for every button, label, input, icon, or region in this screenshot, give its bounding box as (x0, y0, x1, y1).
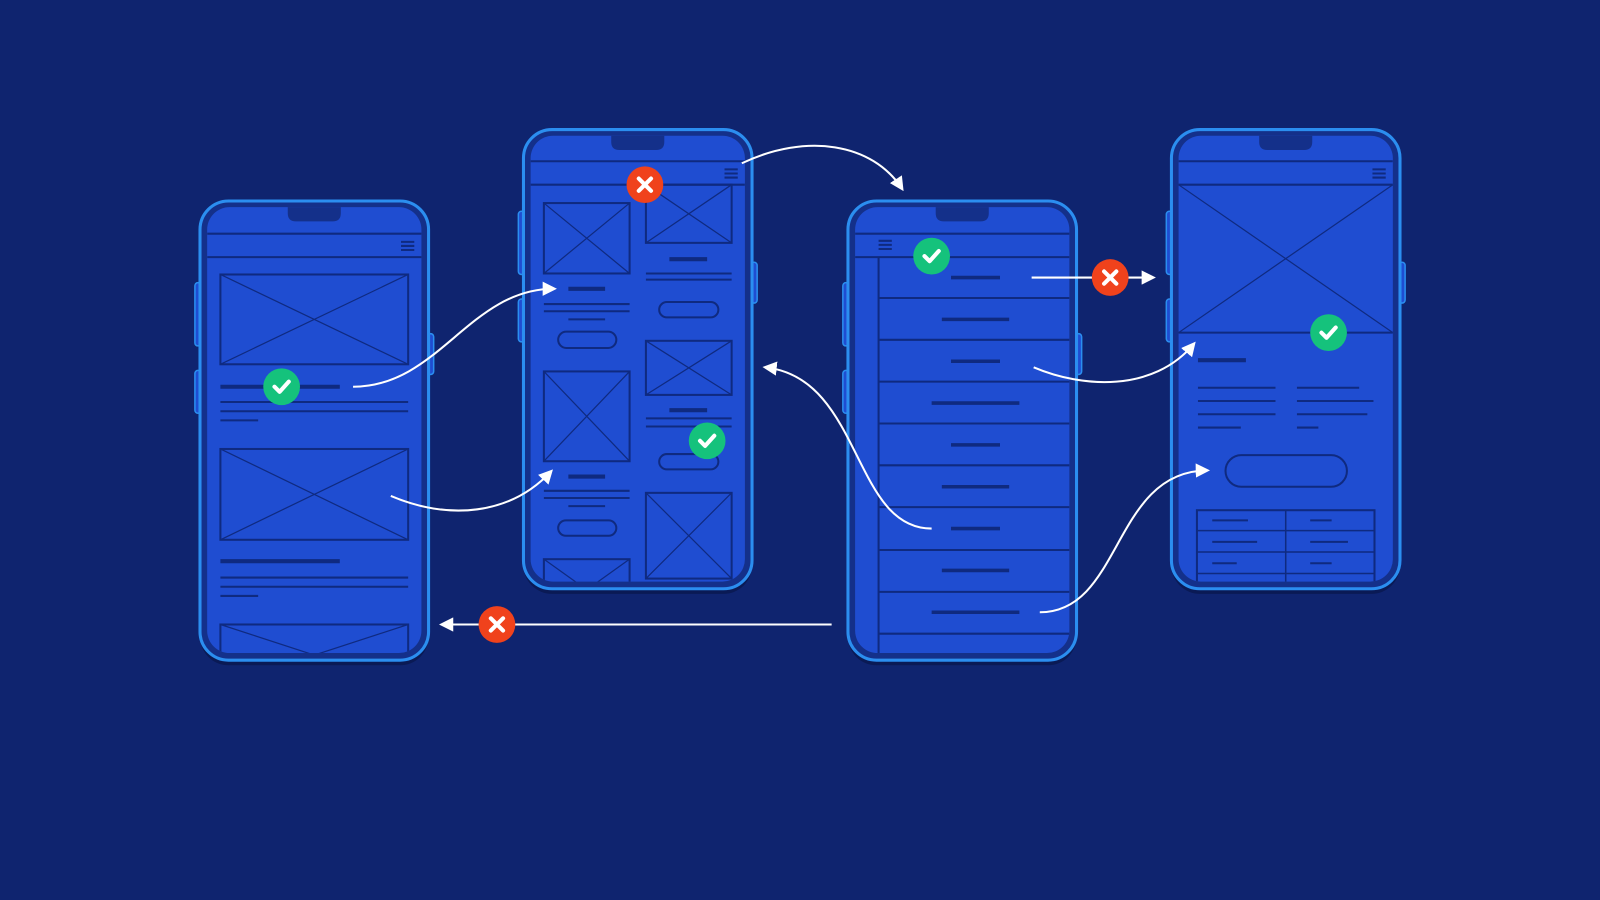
arrow: phone1 to phone2 bottom (391, 471, 551, 511)
arrow: phone3 to phone4 button (1040, 470, 1207, 612)
phone 1 (195, 201, 434, 686)
arrows (353, 146, 1207, 624)
check badge 4 (1310, 314, 1347, 351)
phone 2 (518, 130, 757, 620)
arrow: phone2 to phone3 (742, 146, 902, 189)
badges (263, 166, 1347, 643)
arrow: phone3 back to phone1 (442, 623, 832, 625)
phone 4 (1166, 130, 1405, 594)
arrow: phone3 to phone4 rejected (1032, 277, 1153, 279)
check badge 2 (689, 422, 726, 459)
phone 3 (843, 201, 1082, 665)
cross badge 1 (627, 166, 663, 203)
arrow: phone3 back to phone2 (765, 367, 932, 529)
check badge 1 (263, 368, 300, 405)
arrow: phone3 to phone4 image (1034, 344, 1194, 382)
infographic canvas (194, 128, 1406, 666)
arrow: phone1 to phone2 top (353, 289, 554, 387)
cross badge 2 (1092, 259, 1129, 296)
cross badge 3 (479, 606, 515, 643)
check badge 3 (913, 238, 950, 274)
